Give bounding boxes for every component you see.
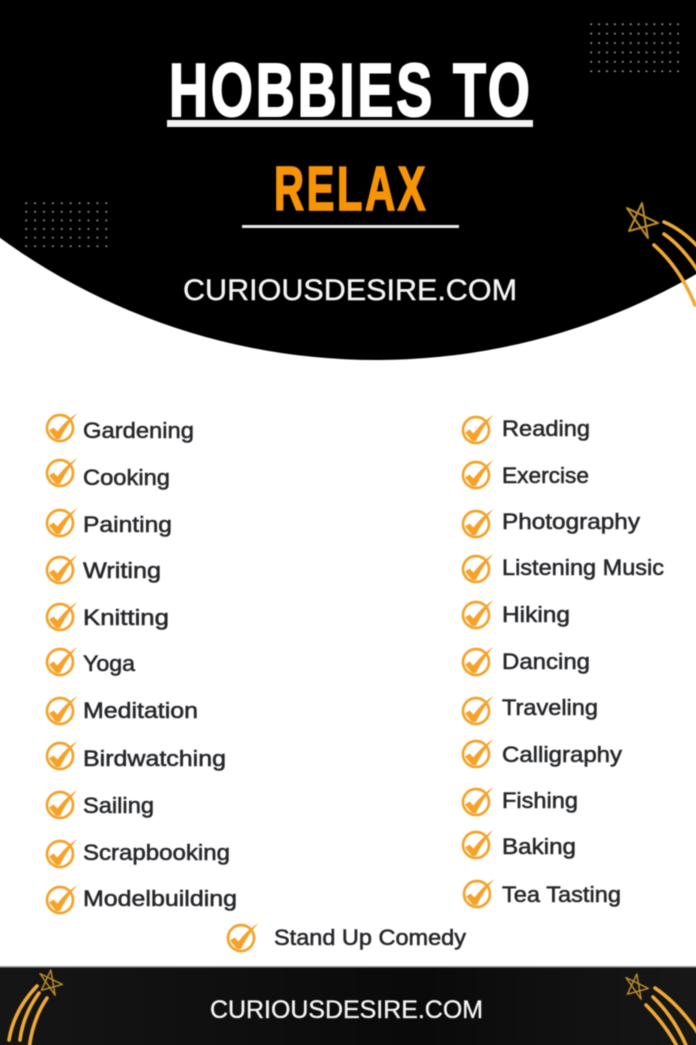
item: Photography: [463, 509, 640, 537]
item: Meditation: [47, 696, 198, 724]
website text header: CURIOUSDESIRE.COM: [183, 274, 517, 307]
item: Stand Up Comedy: [228, 923, 466, 951]
heading: Relax: RELAX: [274, 155, 428, 224]
item: Cooking: Cooking: [83, 465, 170, 490]
item: Photography: Photography: [502, 509, 640, 534]
item: Dancing: [463, 647, 590, 675]
item: Yoga: Yoga: [83, 651, 136, 676]
item: Baking: [463, 830, 576, 859]
item: Tea Tasting: [464, 879, 621, 907]
item: Birdwatching: [47, 741, 226, 771]
dots decoration left: [25, 202, 108, 248]
item: Painting: [47, 508, 172, 537]
item: Listening Music: Listening Music: [502, 555, 664, 580]
item: Baking: Baking: [502, 834, 576, 859]
website text footer: CURIOUSDESIRE.COM: [210, 996, 483, 1024]
item: Traveling: [463, 695, 598, 724]
footer bar: [0, 966, 696, 1045]
item: Fishing: Fishing: [502, 788, 578, 813]
item: Scrapbooking: Scrapbooking: [83, 840, 230, 865]
item: Painting: Painting: [83, 512, 172, 537]
icon: shooting star top right: [627, 203, 696, 305]
item: Dancing: Dancing: [502, 649, 590, 674]
item: Listening Music: [463, 554, 664, 582]
item: Writing: [47, 555, 161, 583]
item: Exercise: Exercise: [502, 463, 589, 488]
item: Knitting: Knitting: [83, 605, 169, 630]
item: Hiking: [463, 600, 570, 628]
item: Birdwatching: Birdwatching: [83, 746, 226, 771]
title: Hobbies to: HOBBIES TO: [169, 48, 533, 132]
item: Calligraphy: [463, 739, 622, 767]
item: Stand Up Comedy: Stand Up Comedy: [274, 925, 466, 950]
header panel: black curved background: [0, 0, 696, 360]
item: Knitting: [47, 602, 169, 630]
title underline: [167, 120, 533, 127]
heading underline: [242, 225, 459, 228]
item: Reading: Reading: [502, 416, 590, 441]
icon: shooting star footer left: [9, 970, 62, 1045]
item: Tea Tasting: Tea Tasting: [502, 882, 621, 907]
item: Hiking: Hiking: [502, 602, 570, 627]
item: Yoga: [47, 647, 136, 676]
item: Reading: [463, 415, 590, 443]
item: Gardening: [47, 413, 194, 443]
item: Writing: Writing: [83, 558, 161, 583]
item: Fishing: [463, 787, 578, 815]
item: Gardening: Gardening: [83, 418, 194, 443]
item: Modelbuilding: Modelbuilding: [83, 886, 237, 911]
dots decoration top right: [590, 23, 679, 73]
item: Meditation: Meditation: [83, 698, 198, 723]
item: Modelbuilding: [47, 885, 237, 913]
icon: shooting star footer right: [626, 974, 696, 1045]
item: Scrapbooking: [47, 839, 230, 867]
item: Exercise: [463, 460, 589, 488]
item: Sailing: Sailing: [83, 793, 154, 818]
item: Calligraphy: Calligraphy: [502, 742, 622, 767]
item: Sailing: [47, 790, 154, 818]
right column list: [463, 415, 664, 907]
left column list: [47, 413, 237, 913]
item: Cooking: [47, 458, 170, 490]
item: Traveling: Traveling: [502, 695, 598, 720]
